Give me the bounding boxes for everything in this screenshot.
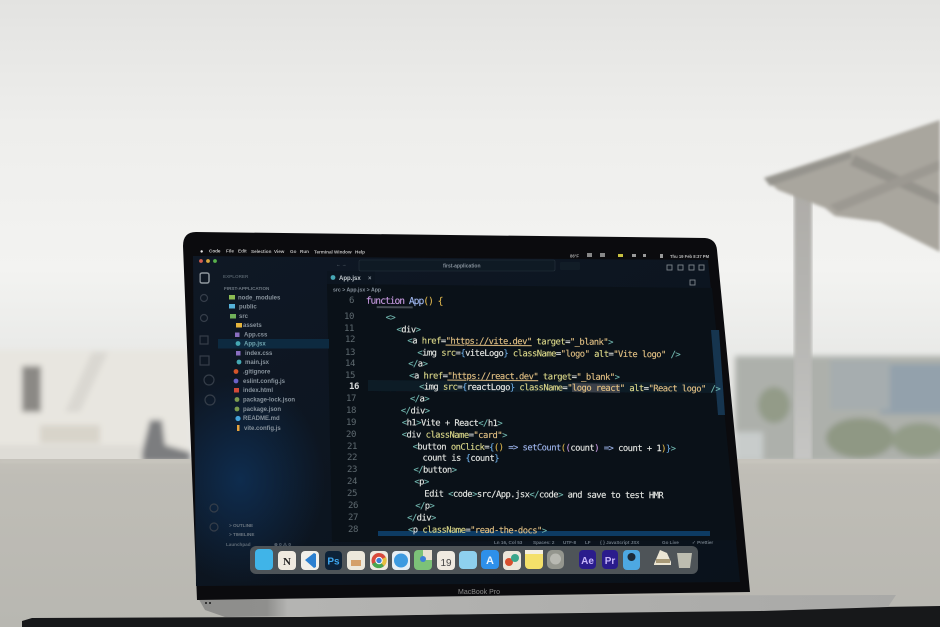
window layout buttons <box>667 265 704 285</box>
code lines: <a href="https://vite.dev" target="_blank"> <box>407 336 613 348</box>
code lines: </a> <box>410 394 429 405</box>
line numbers: 23 <box>347 465 357 475</box>
code lines: Edit <code>src/App.jsx</code> and save to test HMR <box>424 489 664 501</box>
line numbers: 18 <box>346 406 356 416</box>
title bar search box: first-application <box>443 264 481 270</box>
explorer sidebar: App.jsx <box>244 342 266 348</box>
line numbers: 22 <box>347 453 357 463</box>
code lines: function App() { <box>366 296 443 307</box>
code lines: <p className="read-the-docs"> <box>408 525 547 536</box>
tab: App.jsx: App.jsx <box>339 276 361 282</box>
menu bar: Edit <box>238 249 247 254</box>
menu bar: ● <box>200 249 203 255</box>
line numbers: 14 <box>345 359 355 369</box>
dock icons: Pr <box>605 556 615 567</box>
line numbers: 28 <box>348 525 358 535</box>
folder and file icons <box>229 295 242 431</box>
status bar: { } JavaScript JSX <box>600 540 640 545</box>
code lines: count is {count} <box>423 453 499 464</box>
line numbers: 10 <box>344 312 354 322</box>
status bar: UTF-8 <box>563 540 576 545</box>
line numbers: 6 <box>349 296 354 306</box>
tab: App.jsx <box>327 271 375 284</box>
concrete wall <box>0 459 940 627</box>
explorer sidebar: FIRST-APPLICATION <box>224 286 270 291</box>
explorer sidebar: EXPLORER <box>223 274 249 279</box>
line numbers: 13 <box>345 348 355 358</box>
line numbers: 24 <box>347 477 357 487</box>
title bar search box: ← → <box>336 262 346 267</box>
explorer sidebar: assets <box>243 323 262 329</box>
menu bar <box>200 248 710 259</box>
line numbers: 15 <box>345 371 355 381</box>
status bar: ⊗ 0 ⚠ 0 <box>274 542 291 547</box>
code lines: </a> <box>408 359 428 369</box>
explorer sidebar: main.jsx <box>245 360 270 366</box>
code lines: </button> <box>413 465 457 476</box>
code lines: <> <box>386 313 395 323</box>
explorer sidebar: vite.config.js <box>244 426 281 432</box>
line numbers: 27 <box>348 513 358 523</box>
explorer sidebar: public <box>239 304 257 310</box>
status bar <box>226 540 713 547</box>
menu bar: Go <box>290 249 297 254</box>
background: pavilion roof <box>764 120 940 252</box>
screen <box>155 256 740 586</box>
dock icons: Ae <box>581 556 594 567</box>
code lines: </p> <box>415 501 435 512</box>
laptop base <box>197 595 896 617</box>
menu bar: Help <box>355 250 365 255</box>
explorer sidebar: > OUTLINE <box>229 523 253 528</box>
background: blurred buildings at left <box>0 350 190 465</box>
dock icons <box>255 549 692 570</box>
dark table edge <box>22 606 940 627</box>
code lines: <h1>Vite + React</h1> <box>402 418 502 429</box>
code lines: </div> <box>407 513 436 524</box>
code lines: <a href="https://react.dev" target="_blank"> <box>409 371 620 383</box>
minimap scroll bar <box>711 330 725 415</box>
explorer sidebar: index.css <box>245 351 273 357</box>
code lines: <div className="card"> <box>402 430 507 441</box>
explorer sidebar: > TIMELINE <box>229 532 254 537</box>
status bar: Ln 16, Col 53 <box>494 540 523 545</box>
laptop lid bezel <box>183 232 750 600</box>
status bar: ✓ Prettier <box>692 540 713 545</box>
menu bar: Thu 19 Feb 8:37 PM <box>670 254 710 259</box>
breadcrumb: src > App.jsx > App <box>333 288 381 294</box>
MacBook Pro label: MacBook Pro <box>458 589 500 596</box>
line numbers: 17 <box>346 394 356 404</box>
line numbers: 11 <box>344 324 354 334</box>
explorer sidebar: README.md <box>243 416 280 422</box>
macOS dock <box>250 546 698 574</box>
status bar: LF <box>585 540 591 545</box>
line numbers: 20 <box>346 430 356 440</box>
screen reflection <box>194 395 310 566</box>
code lines <box>364 296 721 538</box>
line numbers: 25 <box>347 489 357 499</box>
background: blurred trees and water at right <box>735 356 940 462</box>
code editor <box>344 296 725 538</box>
explorer sidebar: package.json <box>243 407 281 413</box>
code lines: <img src={viteLogo} className="logo" alt="Vite logo" /> <box>417 348 680 360</box>
line numbers: 16 <box>349 382 359 392</box>
code lines: <button onClick={() => setCount((count) => count + 1)}> <box>413 442 676 454</box>
menu bar: Selection <box>251 249 272 254</box>
explorer sidebar: src <box>239 314 249 320</box>
menu bar: Run <box>300 249 309 254</box>
activity bar icons <box>200 273 218 531</box>
menu bar: Terminal <box>314 249 333 254</box>
code lines: </div> <box>401 406 430 417</box>
code lines: <img src={reactLogo} className="logo react" alt="React logo" /> <box>419 382 720 395</box>
status bar: Launchpad <box>226 542 251 547</box>
dock icons: Ps <box>327 556 340 568</box>
explorer sidebar: eslint.config.js <box>243 379 286 385</box>
menu bar: View <box>274 249 285 254</box>
line numbers: 21 <box>347 442 357 452</box>
explorer sidebar <box>218 274 329 537</box>
menu bar: Code <box>209 248 221 254</box>
explorer sidebar: node_modules <box>238 296 281 302</box>
selected file highlight <box>218 339 329 348</box>
line numbers <box>344 296 359 535</box>
menu bar: File <box>226 249 234 254</box>
title bar search box <box>336 260 580 271</box>
background: pavilion post <box>794 192 812 460</box>
background: hazy sky <box>0 0 940 360</box>
current line highlight <box>368 380 722 393</box>
explorer sidebar: App.css <box>244 332 268 338</box>
window traffic lights <box>199 259 217 263</box>
status bar: Spaces: 2 <box>533 540 555 545</box>
dock icons: 19 <box>440 558 452 569</box>
explorer sidebar: package-lock.json <box>243 398 295 404</box>
line numbers: 12 <box>345 335 355 345</box>
line numbers: 19 <box>346 418 356 428</box>
selection highlight <box>572 383 620 393</box>
line numbers: 26 <box>348 501 358 511</box>
menu bar: Window <box>334 250 352 254</box>
editor panel <box>327 284 737 542</box>
status bar: Go Live <box>662 540 679 545</box>
explorer sidebar: .gitignore <box>243 370 271 376</box>
tab: App.jsx: × <box>368 276 372 282</box>
explorer sidebar: index.html <box>243 388 273 394</box>
menu bar: 86°F <box>570 254 579 258</box>
code lines: <div> <box>396 325 421 335</box>
dock icons: N <box>283 556 291 568</box>
dock icons: A <box>486 555 494 567</box>
code lines: <p> <box>414 477 429 488</box>
